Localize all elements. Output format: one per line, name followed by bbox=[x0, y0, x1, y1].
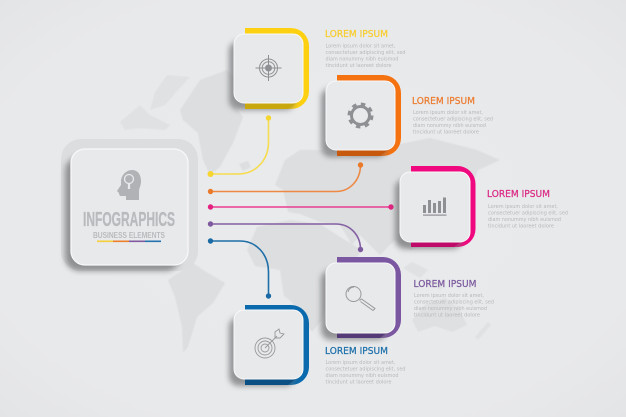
panel backing bbox=[61, 139, 198, 271]
icon: head with light bulb bbox=[117, 170, 141, 200]
body: Lorem ipsum dolor sit amet, bbox=[326, 44, 396, 50]
step 3: pink card bbox=[395, 166, 476, 249]
step 5: blue card bbox=[229, 305, 309, 386]
icon: crosshair bbox=[256, 55, 282, 81]
heading: LOREM IPSUM bbox=[414, 279, 476, 290]
body: consectetuer adipiscing elit, sed bbox=[326, 366, 406, 372]
step 4 text bbox=[414, 279, 494, 318]
panel shadow bbox=[65, 157, 180, 271]
body: Lorem ipsum dolor sit amet, bbox=[488, 204, 558, 210]
heading: LOREM IPSUM bbox=[412, 96, 475, 107]
body: tincidunt ut laoreet dolore bbox=[488, 224, 554, 230]
step 1 text bbox=[325, 29, 406, 69]
body: consectetuer adipiscing elit, sed bbox=[413, 116, 493, 122]
card bbox=[400, 172, 470, 242]
card shadow bbox=[321, 88, 387, 157]
icon: bar chart bbox=[423, 198, 446, 216]
card shadow bbox=[395, 179, 462, 249]
subtitle: business elements: BUSINESS ELEMENTS bbox=[93, 230, 165, 240]
central panel bbox=[61, 139, 198, 271]
map: iceland bbox=[239, 161, 251, 171]
band shadow bbox=[337, 332, 388, 338]
band shadow bbox=[411, 241, 462, 247]
body bbox=[413, 110, 493, 136]
map: islands bbox=[403, 262, 491, 340]
title: infographics: INFOGRAPHICS bbox=[83, 209, 175, 231]
body: tincidunt ut laoreet dolore bbox=[326, 63, 392, 69]
card bbox=[326, 81, 395, 150]
body bbox=[414, 293, 494, 318]
step 2 text bbox=[412, 96, 493, 136]
body: tincidunt ut laoreet dolore bbox=[326, 380, 392, 386]
coloured band bbox=[245, 305, 309, 385]
card bbox=[234, 310, 303, 379]
body: tincidunt ut laoreet dolore bbox=[413, 130, 479, 136]
connector: purple bbox=[208, 221, 363, 252]
step 5 text bbox=[325, 346, 406, 386]
body bbox=[488, 204, 568, 230]
icon: gear bbox=[349, 104, 372, 127]
icon: dart target bbox=[255, 329, 284, 358]
coloured band bbox=[411, 166, 476, 247]
body: consectetuer adipiscing elit, sed bbox=[326, 50, 406, 56]
body: consectetuer adipiscing elit, sed bbox=[488, 210, 568, 216]
connector: pink bbox=[208, 204, 394, 210]
map: greenland and arctic bbox=[180, 70, 243, 175]
colour bar bbox=[97, 240, 161, 242]
band shadow bbox=[337, 150, 388, 156]
body: diam nonummy nibh euismod bbox=[326, 373, 398, 379]
coloured band bbox=[245, 28, 309, 109]
world map bbox=[120, 70, 500, 353]
body: diam nonummy nibh euismod bbox=[414, 306, 487, 312]
body: consectetuer adipiscing elit, sed bbox=[414, 300, 494, 306]
body: diam nonummy nibh euismod bbox=[413, 123, 486, 129]
connector: blue bbox=[208, 238, 271, 299]
card shadow bbox=[321, 270, 387, 340]
connector: orange bbox=[208, 162, 363, 194]
heading: LOREM IPSUM bbox=[325, 346, 388, 357]
card bbox=[326, 263, 395, 333]
band shadow bbox=[245, 103, 296, 109]
map: australia bbox=[412, 298, 467, 332]
body bbox=[326, 360, 406, 386]
body: Lorem ipsum dolor sit amet, bbox=[413, 110, 483, 116]
band shadow bbox=[245, 379, 296, 385]
coloured band bbox=[337, 257, 401, 338]
map: africa bbox=[247, 220, 362, 332]
connector: yellow bbox=[208, 115, 271, 177]
card bbox=[234, 34, 303, 103]
body: Lorem ipsum dolor sit amet, bbox=[414, 293, 484, 299]
heading: LOREM IPSUM bbox=[487, 189, 550, 200]
step 2: orange card bbox=[321, 75, 401, 157]
body: tincidunt ut laoreet dolore bbox=[414, 312, 480, 318]
card shadow bbox=[229, 41, 295, 110]
body: diam nonummy nibh euismod bbox=[326, 56, 398, 62]
body bbox=[326, 44, 406, 69]
step 3 text bbox=[487, 189, 568, 230]
coloured band bbox=[337, 75, 401, 156]
step 1: yellow card bbox=[229, 28, 309, 110]
card shadow bbox=[229, 317, 295, 386]
map: eurasia bbox=[275, 138, 500, 255]
body: diam nonummy nibh euismod bbox=[488, 217, 561, 223]
heading: LOREM IPSUM bbox=[325, 29, 388, 40]
map: south america bbox=[168, 263, 225, 353]
panel card bbox=[71, 149, 188, 265]
map: arctic islands bbox=[120, 75, 190, 130]
step 4: purple card bbox=[321, 257, 401, 340]
body: Lorem ipsum dolor sit amet, bbox=[326, 360, 396, 366]
icon: magnifier bbox=[346, 286, 375, 310]
